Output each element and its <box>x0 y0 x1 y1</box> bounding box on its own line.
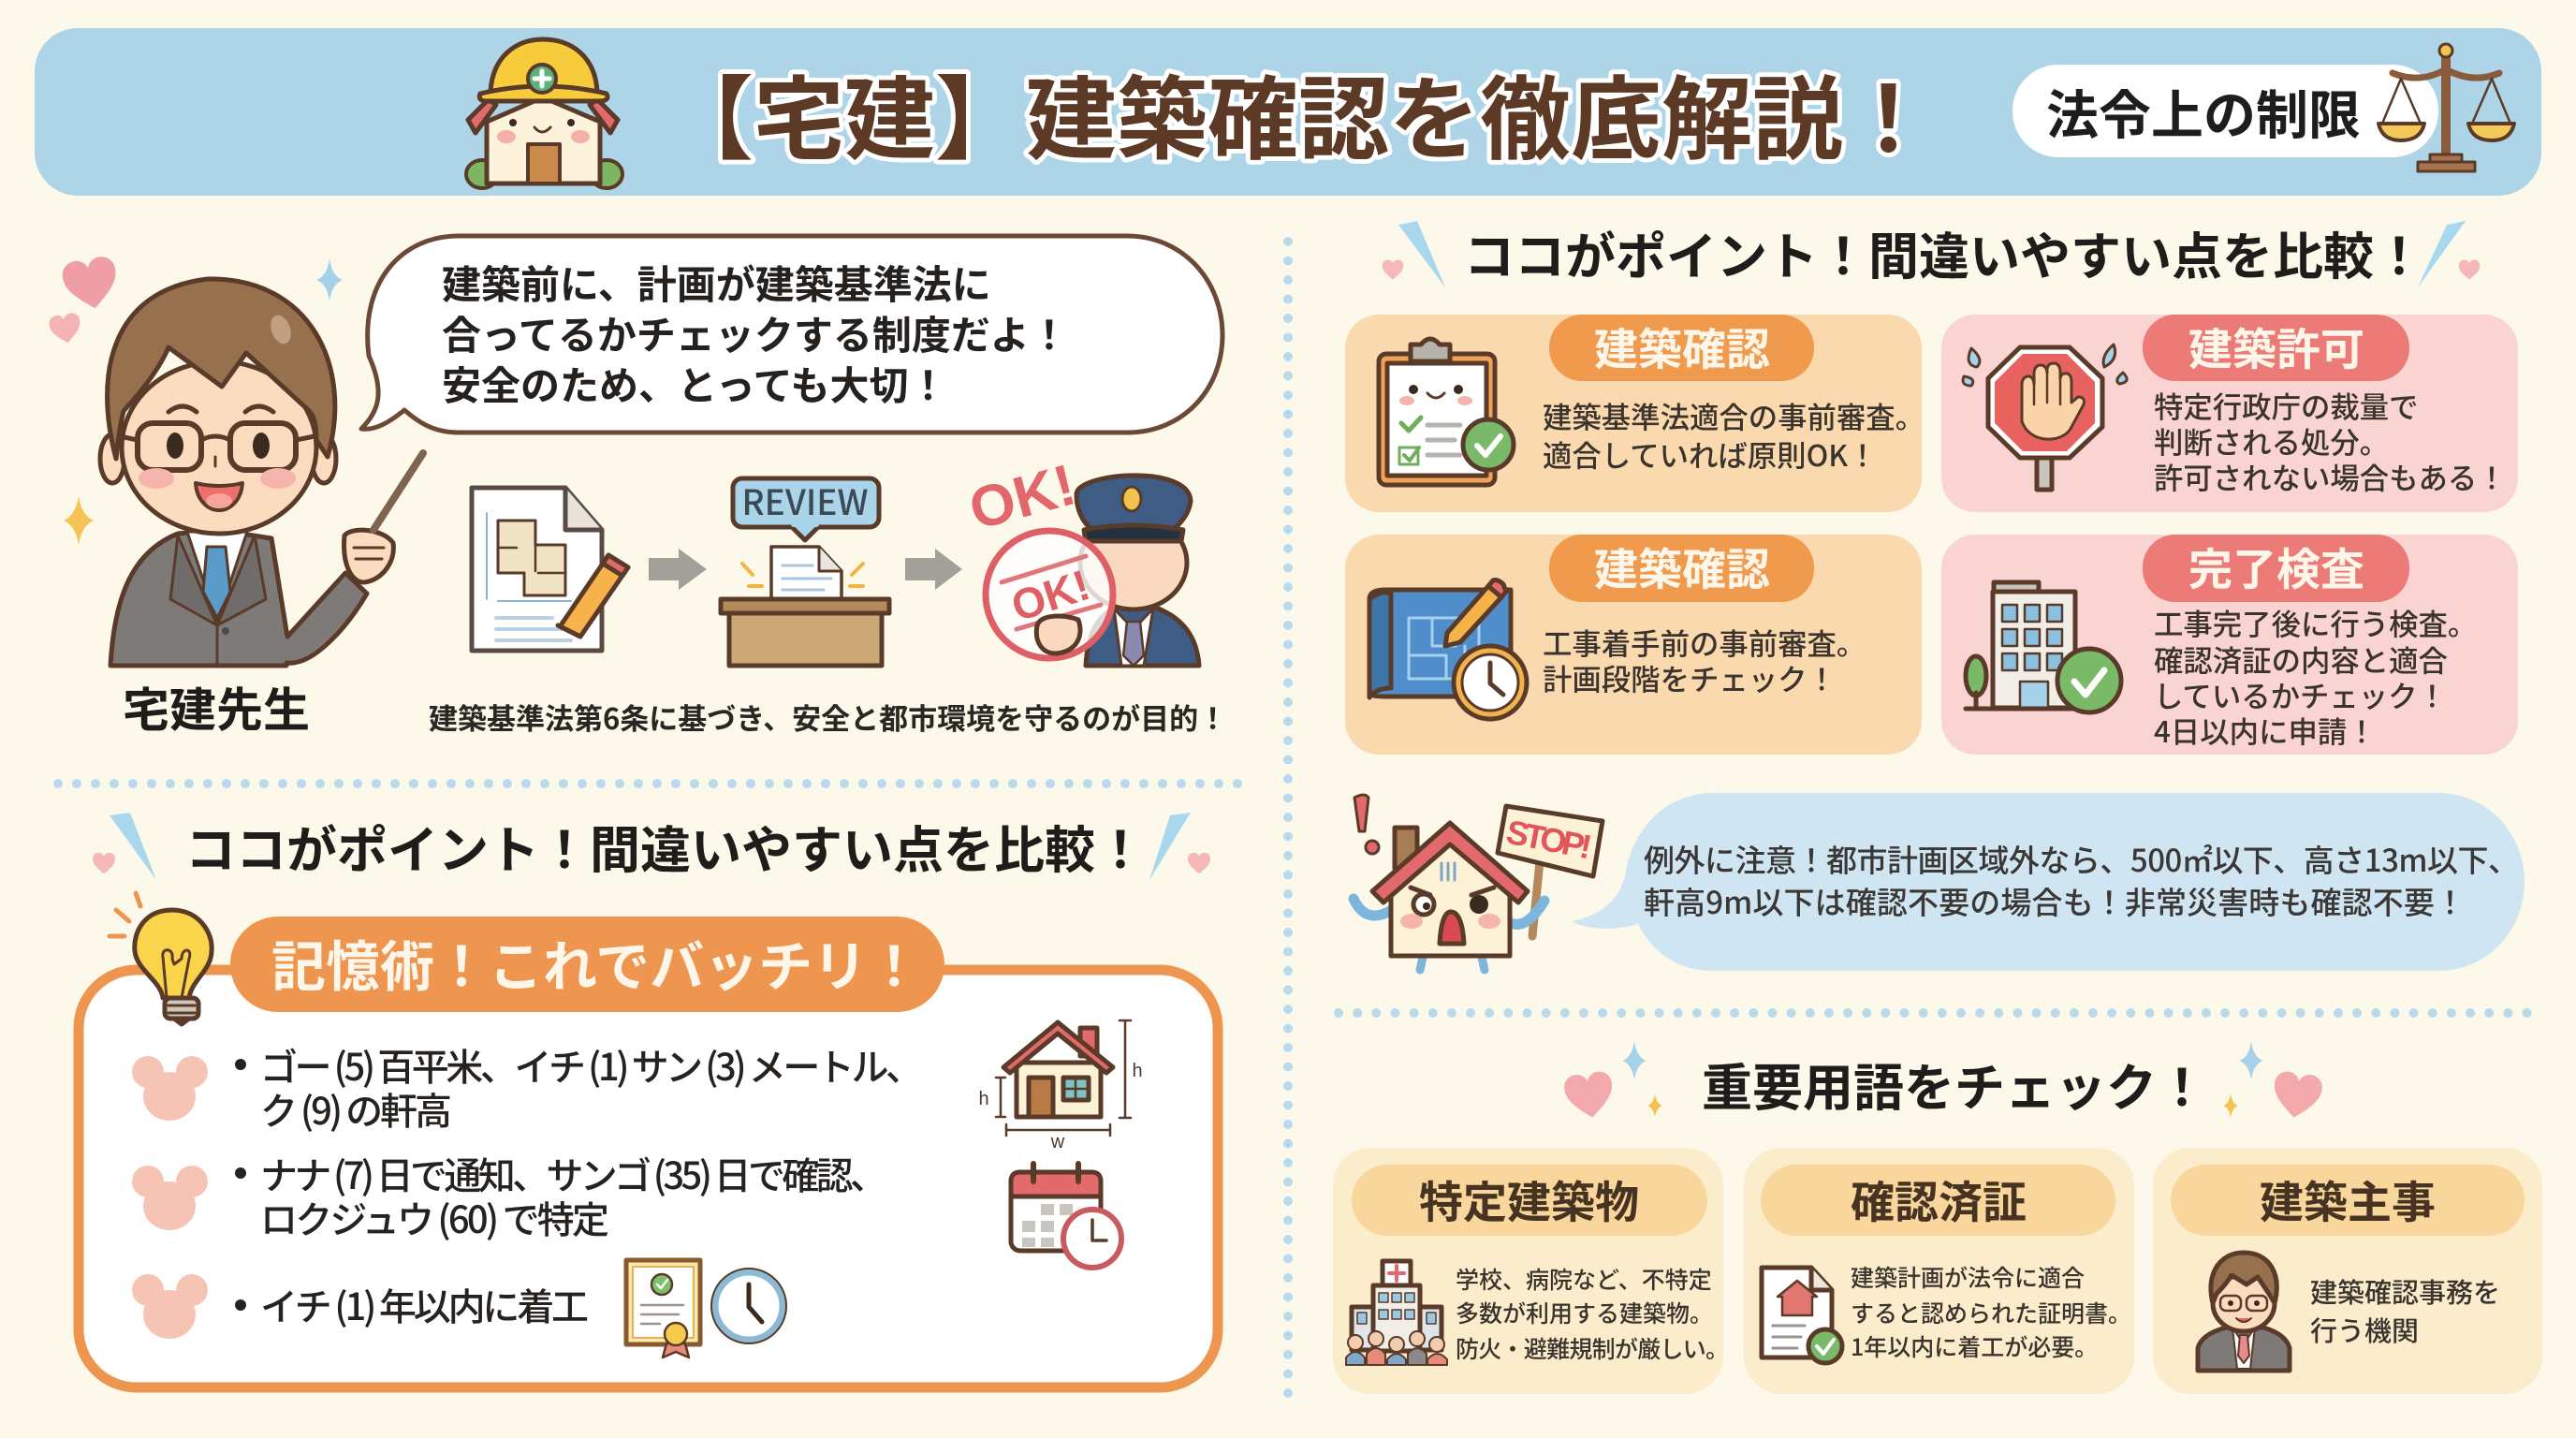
icon: review desk: REVIEW <box>741 475 869 525</box>
text: すると認められた証明書。 <box>1851 1296 2131 1329</box>
icon: blueprint with clock <box>1369 580 1527 719</box>
icon: clock <box>711 1269 786 1343</box>
card: 建築主事 <box>2153 1148 2542 1394</box>
mnemonic item 1 <box>132 1037 923 1136</box>
pill <box>2143 314 2409 381</box>
heading: right comparison: ココがポイント！間違いやすい点を比較！ <box>1464 215 2424 289</box>
name label: 宅建先生 <box>123 673 310 741</box>
speech bubble: 建築前に、計画が建築基準法に <box>442 254 991 311</box>
title: 【宅建】建築確認を徹底解説！ <box>663 46 1934 178</box>
icon: house with dimensions: w <box>1050 1132 1065 1152</box>
icon: light bulb <box>110 893 212 1024</box>
arrow: step two to three <box>905 549 962 590</box>
text: 工事完了後に行う検査。 <box>2154 602 2477 644</box>
text: しているかチェック！ <box>2154 674 2447 716</box>
card: 特定建築物 <box>1333 1148 1729 1394</box>
pill <box>1549 534 1814 602</box>
text: 4日以内に申請！ <box>2154 710 2377 752</box>
text: 建築計画が法令に適合 <box>1851 1260 2085 1294</box>
text: 適合していれば原則OK！ <box>1543 433 1877 476</box>
icon: inspector stamping OK: OK! <box>1005 560 1095 631</box>
card: 建築確認 (timing) <box>1345 534 1922 755</box>
speech bubble: 合ってるかチェックする制度だよ！ <box>442 304 1069 361</box>
decorations around teacher <box>48 255 343 546</box>
pill <box>2171 1165 2525 1236</box>
character: 宅建先生 teacher <box>100 279 423 666</box>
heading: key terms <box>1562 1041 2324 1121</box>
text <box>1851 1260 2131 1363</box>
pill <box>1549 314 1814 381</box>
icon: house with hard hat <box>466 39 622 188</box>
text: 防火・避難規制が厳しい。 <box>1456 1331 1729 1365</box>
caption: 建築基準法第6条に基づき、安全と都市環境を守るのが目的！ <box>429 696 1227 738</box>
badge: 法令上の制限 <box>2012 65 2438 157</box>
icon: completed building <box>1966 582 2121 712</box>
text <box>2154 602 2477 752</box>
pill <box>1352 1165 1707 1236</box>
text <box>1543 395 1925 476</box>
mnemonic item 1: ク (9) の軒高 <box>260 1081 452 1136</box>
pill: 建築主事 <box>2260 1167 2436 1231</box>
icon: inspector stamping OK <box>963 452 1199 666</box>
pill: 建築確認 <box>1594 314 1770 378</box>
card: 建築許可 <box>1941 314 2518 512</box>
text: 建築基準法適合の事前審査。 <box>1543 395 1925 437</box>
mnemonic item 2: ナナ (7) 日で通知、サンゴ (35) 日で確認、 <box>260 1146 887 1200</box>
panel: teacher intro <box>48 236 1227 741</box>
text: 許可されない場合もある！ <box>2154 456 2507 498</box>
panel: mnemonic <box>79 893 1218 1387</box>
text: 多数が利用する建築物。 <box>1456 1296 1713 1329</box>
text <box>2154 385 2507 498</box>
speech bubble: 安全のため、とっても大切！ <box>442 355 948 412</box>
heading: key terms: 重要用語をチェック！ <box>1702 1047 2207 1121</box>
text: 判断される処分。 <box>2154 420 2389 462</box>
mnemonic item 2 <box>132 1146 887 1244</box>
icon: stop hand sign <box>1963 345 2127 490</box>
icon: house with dimensions <box>978 1020 1143 1152</box>
pill <box>1761 1165 2115 1236</box>
icon: house with dimensions: h <box>978 1089 989 1109</box>
text <box>2310 1271 2500 1349</box>
pill: 完了検査 <box>2188 534 2364 598</box>
header pill: 記憶術！これでバッチリ！ <box>271 923 921 1002</box>
icon: stop house mascot: STOP! <box>1503 813 1595 866</box>
icon: house with dimensions: h <box>1132 1061 1143 1081</box>
arrow: step one to two <box>649 549 707 590</box>
badge: 法令上の制限: 法令上の制限 <box>2046 74 2361 150</box>
card: 完了検査 <box>1941 534 2518 755</box>
icon: stop house mascot <box>1354 795 1603 970</box>
icon: certificate <box>626 1260 700 1357</box>
pill <box>2143 534 2409 602</box>
text: OK!: OK! <box>963 452 1082 542</box>
text: 確認済証の内容と適合 <box>2154 638 2448 681</box>
pill: 建築確認 <box>1594 534 1770 598</box>
icon: hospital with people <box>1346 1261 1447 1365</box>
icon: certificate document <box>1762 1268 1842 1363</box>
pill: 確認済証 <box>1851 1167 2027 1231</box>
text <box>1543 622 1866 699</box>
text: 行う機関 <box>2310 1310 2419 1349</box>
icon: review desk <box>721 475 889 666</box>
text: 工事着手前の事前審査。 <box>1543 622 1866 664</box>
card: 確認済証 <box>1744 1148 2134 1394</box>
icon: clipboard <box>1379 339 1514 485</box>
callout: exception notice: 例外に注意！都市計画区域外なら、500㎡以下、高さ13m以下、 <box>1644 836 2519 881</box>
icon: officer person <box>2198 1253 2290 1371</box>
pill: 特定建築物 <box>1419 1167 1639 1231</box>
text: 建築確認事務を <box>2310 1271 2500 1311</box>
callout: exception notice <box>1572 793 2525 971</box>
mnemonic item 2: ロクジュウ (60) で特定 <box>260 1190 609 1244</box>
icon: floor plan document with pencil <box>472 488 628 651</box>
mnemonic item 3: イチ (1) 年以内に着工 <box>260 1277 589 1331</box>
text <box>1456 1262 1729 1365</box>
text: 1年以内に着工が必要。 <box>1851 1329 2098 1363</box>
text: 特定行政庁の裁量で <box>2154 385 2419 427</box>
icon: scales of justice <box>2378 44 2514 171</box>
callout: exception notice: 軒高9m以下は確認不要の場合も！非常災害時も確認不要！ <box>1644 878 2466 923</box>
pill: 建築許可 <box>2188 314 2364 378</box>
icon: calendar and clock <box>1011 1164 1121 1268</box>
mnemonic item 1: ゴー (5) 百平米、イチ (1) サン (3) メートル、 <box>260 1037 923 1092</box>
text: 学校、病院など、不特定 <box>1456 1262 1712 1296</box>
text: 計画段階をチェック！ <box>1543 657 1837 699</box>
speech bubble <box>361 236 1222 433</box>
heading: left comparison: ココがポイント！間違いやすい点を比較！ <box>185 809 1146 883</box>
header banner <box>35 28 2541 196</box>
card: 建築確認 (compliance) <box>1345 314 1925 512</box>
mnemonic item 3 <box>132 1274 589 1339</box>
